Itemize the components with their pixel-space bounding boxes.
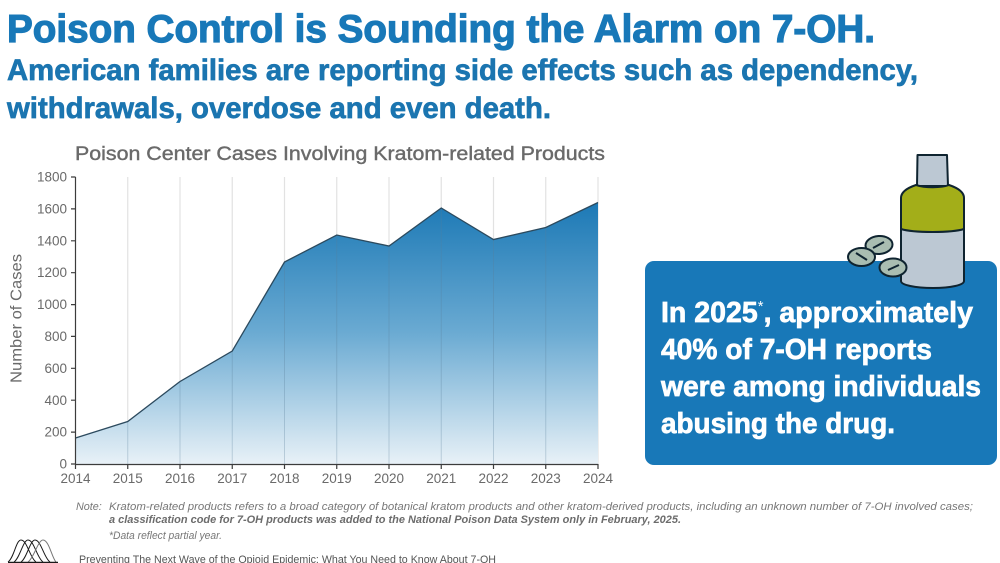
x axis labels: 2016: [165, 471, 195, 486]
footnote: Kratom-related products refers to a broad category of botanical kratom products and other kratom-derived products, including an unknown number of 7-OH involved cases;: [109, 501, 973, 513]
x axis labels: 2020: [374, 471, 404, 486]
area chart: [8, 170, 614, 486]
x axis labels: 2021: [426, 471, 456, 486]
callout panel: [645, 261, 997, 465]
callout text: *: [758, 298, 764, 315]
title: Poison Control is Sounding the Alarm on 7-OH.: [7, 8, 875, 51]
bottle label band: [901, 185, 964, 232]
pill 2: [848, 248, 875, 266]
y axis labels: 1200: [37, 265, 67, 280]
subtitle: [6, 54, 918, 125]
bottle neck: [917, 155, 948, 186]
callout text: , approximately: [764, 297, 973, 329]
chart title: Poison Center Cases Involving Kratom-related Products: [75, 144, 605, 165]
y axis labels: 800: [44, 329, 67, 344]
footer logo: [8, 540, 58, 562]
footnote: *Data reflect partial year.: [109, 530, 222, 542]
pill 1: [865, 235, 893, 255]
pill 3: [880, 258, 906, 276]
y axis labels: 1600: [37, 201, 67, 216]
y axis labels: 1800: [37, 170, 67, 184]
callout text: In 2025: [661, 297, 759, 329]
x axis labels: 2019: [322, 471, 352, 486]
bottle lower body: [901, 229, 964, 288]
subtitle: American families are reporting side effects such as dependency,: [7, 54, 918, 87]
y axis title: Number of Cases: [8, 254, 26, 383]
y axis labels: 200: [44, 425, 67, 440]
callout text: abusing the drug.: [661, 408, 895, 440]
y axis labels: [37, 170, 67, 472]
subtitle: withdrawals, overdose and even death.: [6, 92, 551, 125]
y axis labels: 1000: [37, 297, 67, 312]
x axis labels: 2024: [583, 471, 614, 486]
footnote: Note:: [76, 501, 102, 513]
footnote: a classification code for 7-OH products was added to the National Poison Data System only in February, 2025.: [109, 514, 681, 526]
y axis labels: 400: [44, 393, 67, 408]
x axis labels: 2023: [531, 471, 561, 486]
x axis labels: 2015: [113, 471, 143, 486]
x axis labels: [60, 471, 614, 486]
y axis labels: 1400: [37, 233, 67, 248]
y axis labels: 0: [59, 456, 67, 472]
callout text: [660, 297, 981, 440]
callout text: 40% of 7-OH reports: [661, 334, 932, 366]
x axis labels: 2017: [217, 471, 247, 486]
data area: [76, 202, 598, 464]
x axis labels: 2022: [478, 471, 509, 486]
callout text: were among individuals: [660, 371, 981, 403]
x axis labels: 2018: [269, 471, 300, 486]
footnote: [76, 501, 973, 542]
data line: [76, 202, 598, 438]
x axis labels: 2014: [60, 471, 91, 486]
icon: bottle and pills: [848, 155, 964, 288]
y axis labels: 600: [44, 361, 67, 376]
axes: [71, 177, 598, 469]
